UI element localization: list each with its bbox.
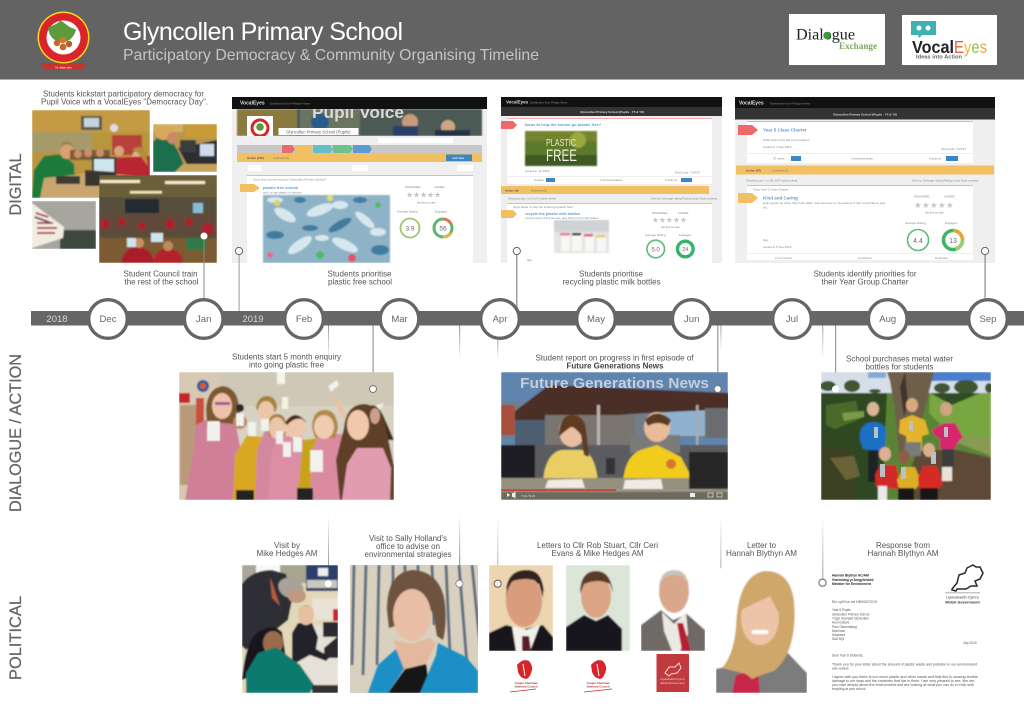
screenshot: recycling milk bottles: Archived (2) (531, 188, 547, 192)
caption: democracy day (41, 90, 208, 106)
letter from Welsh Government: Thank you for your letter about the amount of plastic waste and pollution in our environment (832, 662, 977, 666)
screenshot: plastic free school: DISAGREE (405, 185, 421, 189)
caption: democracy day: Students kickstart participatory democracy for (43, 90, 204, 98)
section label: dialogue / action: DIALOGUE / ACTION (7, 354, 25, 512)
screenshot: year group charter: posted in 5 Sep 2019 (763, 245, 792, 249)
screenshot: plastic free school: Dashboard Vote Pledge News (270, 102, 311, 106)
month: Mar (380, 300, 419, 338)
video still: future generations news: Future Generations News (520, 375, 709, 392)
screenshot: recycling milk bottles: AGREE (678, 211, 689, 215)
logo: council one: Swansea Council (514, 684, 538, 688)
caption: water bottles (846, 354, 953, 372)
screenshot: year group charter: VocalEyes (739, 100, 764, 106)
logo: VocalEyes: Ideas into Action (916, 54, 963, 60)
logo: Dialogue Exchange: Exchange (839, 42, 877, 52)
caption: letters to councillors: Letters to Cllr Rob Stuart, Cllr Ceri (537, 541, 658, 550)
screenshot: recycling milk bottles: Topic Ideas to help the school go plastic free? (513, 205, 574, 209)
caption: future generations news: Future Generations News (566, 362, 664, 370)
letter from Welsh Government: damage to our seas and the creatures that live in them. I am very pleased to see, like me, (832, 679, 975, 683)
logo: welsh government red: Welsh Government (661, 681, 685, 685)
month: May: May (587, 314, 605, 325)
letter from Welsh Government: Ysgol Gynradd Glyncollen (832, 616, 869, 620)
letter from Welsh Government: Year 6 Pupils (832, 608, 851, 612)
screenshot: plastic free school: ★ (406, 190, 413, 200)
screenshot: year group charter: DISAGREE (914, 194, 930, 198)
screenshot: year group charter: posted in 4 Sep 2019 (763, 145, 792, 149)
month: Jul (773, 300, 811, 338)
screenshot: recycling milk bottles: PLASTIC (546, 138, 576, 149)
month: Apr: Apr (493, 314, 507, 325)
screenshot: year group charter: 10 Actions (858, 256, 872, 260)
section label: digital: DIGITAL (7, 154, 25, 216)
connector: charter screenshot (981, 247, 989, 298)
screenshot: year group charter (735, 97, 995, 263)
screenshot: plastic free school: plastic free school (263, 185, 298, 190)
logo: welsh government red: Llywodraeth Cymru (660, 677, 685, 681)
screenshot: recycling milk bottles: decline to rate (661, 225, 680, 229)
screenshot: year group charter: AGREE (944, 194, 955, 198)
caption: response from hannah blythyn: Response from (876, 541, 930, 550)
month: Sep: Sep (980, 314, 996, 325)
month: Feb (285, 300, 323, 338)
screenshot: year group charter: Dashboard Vote Pledge News (770, 102, 811, 106)
month: Feb: Feb (296, 314, 312, 325)
screenshot: year group charter: Archived (2) (772, 168, 788, 172)
letter from Welsh Government: you care deeply about the environment and are looking at what you can do to help with (832, 683, 974, 687)
screenshot: year group charter: 4.4 (913, 238, 923, 245)
caption: five month enquiry: Students start 5 month enquiry (232, 352, 341, 362)
timeline: 2018 (46, 314, 68, 325)
lines rising to political row (328, 515, 823, 580)
screenshot: recycling milk bottles: ★ (666, 216, 673, 224)
caption: water bottles: bottles for students (866, 362, 934, 372)
caption: water bottles: School purchases metal water (846, 354, 953, 364)
caption: plastic free school: plastic free school (328, 278, 392, 286)
screenshot: recycling milk bottles: Showing you 1 to 9 of 9 active ideas (508, 196, 557, 200)
logo: VocalEyes (902, 15, 997, 65)
letter from Welsh Government: Parc Gwernfadog (832, 625, 857, 629)
month: Jun (672, 300, 711, 338)
month: May (577, 300, 615, 338)
screenshot: recycling milk bottles: 24 (682, 247, 688, 253)
caption: milk bottles: recycling plastic milk bottles (562, 278, 660, 286)
month: Jan: Jan (196, 314, 211, 325)
screenshot: recycling milk bottles (501, 97, 722, 263)
photo: whole school classroom (99, 175, 217, 263)
letter from Welsh Government: Dear Year 6 Students, (832, 654, 863, 658)
screenshot: year group charter: ★ (930, 200, 938, 210)
connector: Jan to democracy day photo (200, 232, 208, 301)
caption: student council (124, 270, 199, 286)
photo: Mike Hedges visit (242, 565, 338, 693)
screenshot: year group charter: Topic Year 5 Class Charter (753, 188, 789, 192)
caption: five month enquiry: into going plastic free (249, 360, 325, 370)
month: Jun: Jun (684, 314, 699, 325)
screenshot: recycling milk bottles: ★ (673, 216, 680, 224)
caption: letters to councillors (537, 541, 658, 558)
letter from Welsh Government: Minister for Environment (832, 582, 872, 586)
caption: response from hannah blythyn (868, 541, 939, 558)
screenshot: recycling milk bottles: 5 actions (665, 178, 678, 182)
caption: sally holland office: office to advise on (376, 542, 440, 551)
caption: letter to hannah blythyn: Letter to (747, 541, 777, 550)
screenshot: year group charter: etc... (763, 206, 770, 210)
screenshot: recycling milk bottles: 5.0 (652, 248, 661, 254)
screenshot: recycling milk bottles: Ideas to help the school go plastic free? (525, 122, 602, 127)
screenshot: year group charter: Help people up when they have fallen. Ask someone try themselves if they would like to play (763, 201, 886, 205)
icon: school crest: Ni ddaw dim (55, 66, 72, 70)
screenshot: plastic free school: VocalEyes (240, 100, 265, 106)
caption: letter to hannah blythyn: Hannah Blythyn AM (726, 549, 797, 558)
header band (0, 0, 1024, 80)
letter from Welsh Government: July 2019 (963, 641, 977, 645)
screenshot: recycling milk bottles: Glyncollen Primary School (Pupils - Y5 & Y6) (580, 110, 644, 114)
lines descending from timeline (328, 325, 836, 387)
screenshot: year group charter: 0 archived ideas (851, 156, 873, 160)
month: Mar: Mar (391, 314, 408, 325)
screenshot: year group charter: WooCode: TLPIST (941, 147, 966, 151)
screenshot: plastic free school: ★ (413, 190, 420, 200)
caption: plastic free school (328, 270, 392, 286)
screenshot: recycling milk bottles: Average Rating (645, 233, 666, 237)
screenshot: plastic free school: we'd to use plastic in schools (263, 190, 302, 194)
screenshot: recycling milk bottles: recycle the plastic milk bottles (525, 212, 580, 216)
screenshot: year group charter: Kind and Caring (763, 196, 798, 200)
letter from Welsh Government: Ein cyf/Our ref HB/00070/19 (832, 600, 877, 604)
timeline: 2019 (242, 314, 264, 325)
logo: VocalEyes: Vocal (912, 37, 954, 57)
connector: plastic free screenshot (235, 247, 243, 312)
screenshot: year group charter: Year 5 Class Charter (763, 128, 807, 132)
screenshot: plastic free school: Glyncollen Primary School (Pupils) (286, 129, 351, 134)
screenshot: plastic free school: Pupil Voice (312, 103, 404, 122)
caption: year group charter (814, 270, 917, 286)
screenshot: year group charter: ★ (922, 200, 930, 210)
screenshot: year group charter: Sort by: Average rating Rating count Date created (912, 178, 978, 182)
caption: letter to hannah blythyn (726, 541, 797, 558)
screenshot: plastic free school: Active (135) (247, 156, 264, 160)
screenshot: recycling milk bottles: recycle every thing we can, and think of old milk bottles (525, 216, 599, 220)
screenshot: recycling milk bottles: Sort by: Average rating Rating count Date created (651, 196, 717, 200)
screenshot: recycling milk bottles: 9 ideas (534, 178, 544, 182)
screenshot: plastic free school: 56 (439, 226, 447, 232)
caption: year group charter: Students identify priorities for (814, 270, 917, 278)
title: Glyncollen Primary School (123, 18, 403, 46)
month: Jul: Jul (786, 314, 798, 325)
caption: sally holland office: environmental strategies (364, 550, 452, 559)
screenshot: plastic free school: Engaged (435, 210, 447, 214)
logo: council two: Swansea Council (586, 684, 610, 688)
logo: council one (510, 660, 538, 692)
logo: council one: Cyngor Abertawe (514, 681, 538, 685)
screenshot: year group charter: Active (57) (746, 168, 761, 172)
video still: future generations news: 7:14 / 9:21 (521, 494, 536, 498)
logo: VocalEyes: Eyes (954, 37, 987, 57)
logo: Dialogue Exchange: Dialogue (796, 26, 855, 44)
screenshot: recycling milk bottles: posted in Jul 2018 (525, 169, 550, 173)
screenshot: recycling milk bottles: ★ (659, 216, 666, 224)
caption: mike hedges visit: Visit by (274, 541, 300, 550)
screenshot: year group charter: decline to rate (925, 210, 944, 214)
screenshot: year group charter: ★ (914, 200, 922, 210)
photo: Mike Hedges portrait (641, 569, 705, 651)
screenshot: year group charter: Duplicate (935, 256, 948, 260)
photo: Cllr Ceri Evans (566, 565, 630, 651)
screenshot: year group charter: Showing you 1 to 20 of 57 active ideas (746, 178, 798, 182)
screenshot: recycling milk bottles: ★ (680, 216, 687, 224)
month: Sep (969, 300, 1007, 338)
connector: response ring (819, 579, 826, 586)
letter from Welsh Government: Heol Dollars (832, 620, 850, 624)
caption: letters to councillors: Evans & Mike Hedges AM (552, 549, 644, 558)
logo: council two (584, 660, 612, 692)
screenshot: recycling milk bottles: DISAGREE (652, 211, 668, 215)
screenshot: year group charter: Glyncollen Primary School (Pupils - Y5 & Y6) (833, 112, 897, 116)
month: Aug (868, 300, 907, 338)
caption: student council: Student Council train (124, 270, 198, 278)
subtitle: Participatory Democracy & Community Organising Timeline (123, 47, 539, 64)
logo: welsh government red (656, 654, 689, 692)
caption: five month enquiry (232, 352, 341, 370)
icon: welsh dragon: Llywodraeth Cymru (946, 596, 979, 600)
screenshot: recycling milk bottles: flag (527, 258, 532, 262)
letter from Welsh Government: Glyncollen Primary School (832, 612, 870, 616)
connector: letter to hannah ring (717, 580, 724, 587)
screenshot: recycling milk bottles: FREE (546, 146, 577, 165)
caption: mike hedges visit: Mike Hedges AM (256, 549, 318, 558)
caption: future generations news: Student report on progress in first episode of (536, 354, 694, 362)
screenshot: recycling milk bottles: Active (9) (505, 188, 519, 192)
letter from Welsh Government: Gweinidog yr Amgylchedd (832, 578, 873, 582)
photo: Cllr Rob Stuart (489, 565, 553, 651)
photo: students with metal water bottles (821, 372, 991, 500)
logo: council two: Cyngor Abertawe (586, 681, 610, 685)
screenshot: year group charter: ★ (946, 200, 954, 210)
caption: milk bottles (562, 270, 660, 286)
letter from Welsh Government: Hannah Blythyn AC/AM (832, 574, 869, 578)
screenshot: plastic free school: Add Idea (452, 156, 464, 160)
letter from Welsh Government: I agree with you there is too much plastic and other waste and that this is causing terrible (832, 675, 978, 679)
screenshot: year group charter: 57 ideas (773, 156, 785, 160)
photo: classroom group with laptop (32, 110, 150, 198)
logo: Dialogue Exchange (789, 14, 885, 65)
screenshot: plastic free school: Topic How can we improve Glyncollen Primary School? (253, 178, 327, 182)
photo: child at laptop (153, 124, 217, 172)
letter from Welsh Government: recycling at your school. (832, 687, 866, 691)
video still: future generations news (501, 372, 728, 500)
screenshot: plastic free school: ★ (434, 190, 441, 200)
caption: milk bottles: Students prioritise (579, 270, 644, 278)
letter from Welsh Government: and oceans. (832, 666, 849, 670)
screenshot: recycling milk bottles: WooCode: TLPIST (675, 170, 700, 174)
caption: year group charter: their Year Group Charter (822, 278, 909, 286)
screenshot: year group charter: Average Rating (905, 221, 926, 225)
screenshot: year group charter: 13 (949, 238, 957, 245)
photo: Sally Holland (350, 565, 478, 693)
screenshot: plastic free school: AGREE (434, 185, 445, 189)
screenshot: year group charter: Engaged (945, 221, 957, 225)
screenshot: plastic free school: 3.9 (405, 226, 415, 232)
photo: school sign (32, 201, 96, 249)
letter from Welsh Government: Morriston (832, 629, 846, 633)
screenshot: recycling milk bottles: Engaged (679, 233, 691, 237)
connector: milk bottle screenshot (513, 247, 520, 312)
screenshot: plastic free school: Average Rating (397, 210, 418, 214)
screenshot: year group charter: 9 actions (929, 156, 942, 160)
screenshot: recycling milk bottles: Dashboard Vote Pledge News (530, 100, 568, 104)
screenshot: year group charter: flag (763, 238, 768, 242)
caption: democracy day: Pupil Voice wth a VocalEyes "Democracy Day". (41, 98, 208, 106)
timeline (31, 300, 1024, 338)
icon: welsh dragon (945, 565, 983, 604)
screenshot: plastic free school: ★ (427, 190, 434, 200)
screenshot: plastic free school: Archived (5) (273, 156, 289, 160)
photo: students with plastic bottles (179, 372, 394, 500)
letter from Welsh Government: SA6 6QI (832, 637, 844, 641)
icon: welsh dragon: Welsh Government (945, 600, 980, 604)
screenshot: recycling milk bottles: ★ (652, 216, 659, 224)
screenshot: year group charter: ★ (938, 200, 946, 210)
month: Aug: Aug (879, 314, 896, 325)
caption: response from hannah blythyn: Hannah Blythyn AM (868, 549, 939, 558)
letter from Welsh Government (832, 565, 983, 691)
letter from Welsh Government: Swansea (832, 633, 845, 637)
screenshot: plastic free school (232, 97, 487, 263)
screenshot: plastic free school: ★ (420, 190, 427, 200)
month: Apr (481, 300, 519, 338)
photo: Hannah Blythyn (716, 568, 807, 693)
icon: school crest (38, 12, 90, 70)
screenshot: recycling milk bottles: VocalEyes (506, 100, 529, 104)
month: Jan (184, 300, 223, 338)
screenshot: plastic free school: decline to rate (417, 200, 436, 204)
caption: plastic free school: Students prioritise (328, 270, 392, 278)
screenshot: year group charter: 2 Comments (775, 256, 793, 260)
month: Dec: Dec (100, 314, 117, 325)
screenshot: year group charter: What class rules will you prioritise? (763, 138, 810, 142)
section label: political: POLITICAL (7, 596, 25, 680)
screenshot: recycling milk bottles: 2 archived ideas (600, 178, 622, 182)
month: Dec (89, 300, 127, 338)
caption: mike hedges visit (256, 541, 318, 558)
caption: sally holland office (364, 534, 452, 559)
caption: future generations news (536, 354, 694, 370)
caption: sally holland office: Visit to Sally Holland's (369, 534, 447, 543)
caption: student council: the rest of the school (124, 278, 199, 286)
